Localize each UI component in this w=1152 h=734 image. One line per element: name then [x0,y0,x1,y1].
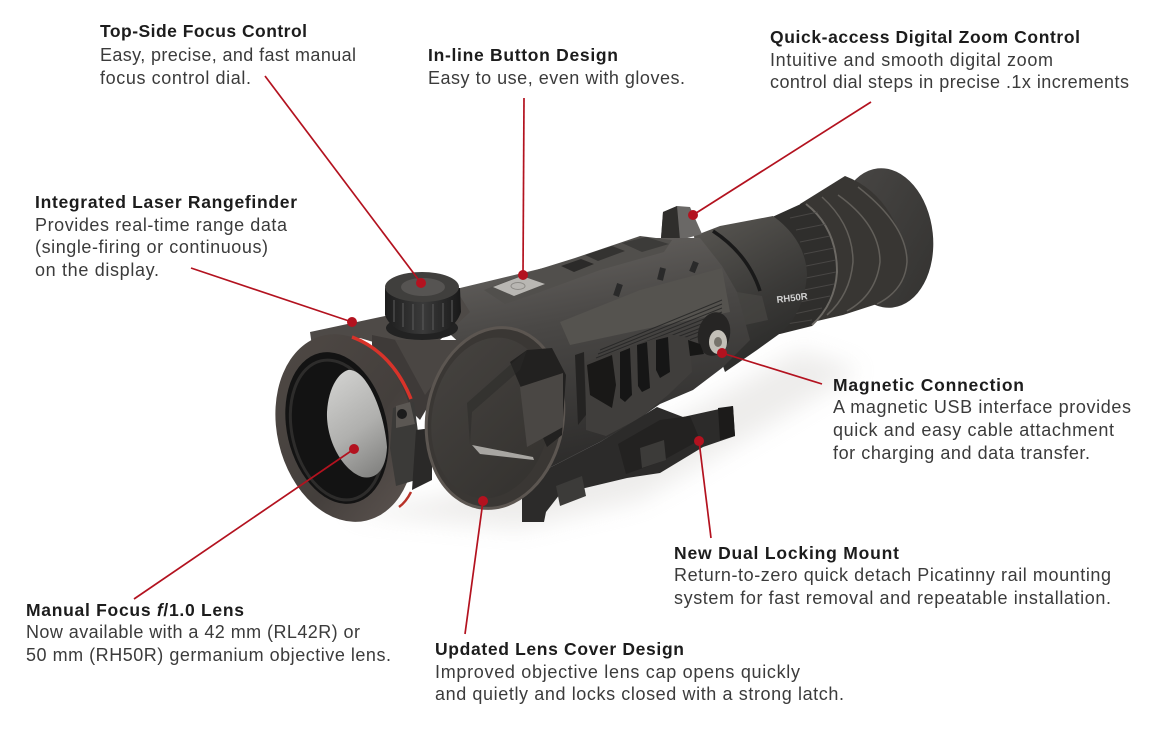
callout: updated lens cover design: Improved objective lens cap opens quickly [435,662,800,682]
callout: integrated laser rangefinder: Provides real-time range data [35,215,288,235]
callout: magnetic connection: quick and easy cable attachment [833,420,1114,440]
callout: in-line button design [428,45,685,280]
digital zoom dial [661,206,702,240]
callout: updated lens cover design [435,496,844,704]
callout: digital zoom control: Intuitive and smooth digital zoom [770,50,1053,70]
callout: integrated laser rangefinder [35,192,357,327]
callout: top-side focus control [100,21,426,288]
callout: new dual locking mount: New Dual Locking Mount [674,543,899,563]
laser rangefinder housing [310,296,470,420]
callout: magnetic connection: for charging and data transfer. [833,443,1090,463]
eyepiece tube [694,216,808,372]
scope product photo [257,163,940,536]
top-side focus dial [385,272,461,340]
callout: digital zoom control [688,27,1129,220]
callout: digital zoom control: control dial steps in precise .1x increments [770,72,1129,92]
magnetic USB port [688,309,734,359]
callout: manual focus lens [26,444,391,665]
callout: magnetic connection [717,348,1131,463]
callout: updated lens cover design: and quietly and locks closed with a strong latch. [435,684,844,704]
hinge [390,402,432,490]
callout: magnetic connection: Magnetic Connection [833,375,1024,395]
top buttons [484,236,672,304]
callout: manual focus lens: Manual Focus f/1.0 Lens [26,600,244,620]
callout: new dual locking mount: system for fast removal and repeatable installation. [674,588,1111,608]
main body [440,238,750,470]
callout: magnetic connection: A magnetic USB interface provides [833,397,1131,417]
callout: integrated laser rangefinder: on the display. [35,260,159,280]
objective lens assembly [257,320,433,536]
callout: new dual locking mount: Return-to-zero quick detach Picatinny rail mounting [674,565,1111,585]
callout: integrated laser rangefinder: (single-firing or continuous) [35,237,268,257]
callout: integrated laser rangefinder: Integrated Laser Rangefinder [35,192,297,212]
ground shadow [340,350,860,528]
callout: in-line button design: Easy to use, even with gloves. [428,68,685,88]
callout: manual focus lens: 50 mm (RH50R) germanium objective lens. [26,645,391,665]
eyepiece rubber cup and bellows [800,163,940,325]
red accent ring [352,337,411,399]
callout: new dual locking mount [674,436,1111,608]
picatinny side rail [575,334,692,436]
callout: top-side focus control: focus control dial. [100,68,251,88]
callout: top-side focus control: Top-Side Focus Control [100,21,307,41]
eyepiece knurled focus ring [745,203,838,336]
dual locking mount [522,406,735,522]
RH50R model mark: RH50R [776,291,808,306]
callout: manual focus lens: Now available with a 42 mm (RL42R) or [26,622,360,642]
callout: in-line button design: In-line Button Design [428,45,618,65]
germanium lens glass [327,370,387,478]
callout: top-side focus control: Easy, precise, and fast manual [100,45,356,65]
callout: digital zoom control: Quick-access Digital Zoom Control [770,27,1080,47]
callout: updated lens cover design: Updated Lens Cover Design [435,639,684,659]
lens cover [412,317,578,519]
